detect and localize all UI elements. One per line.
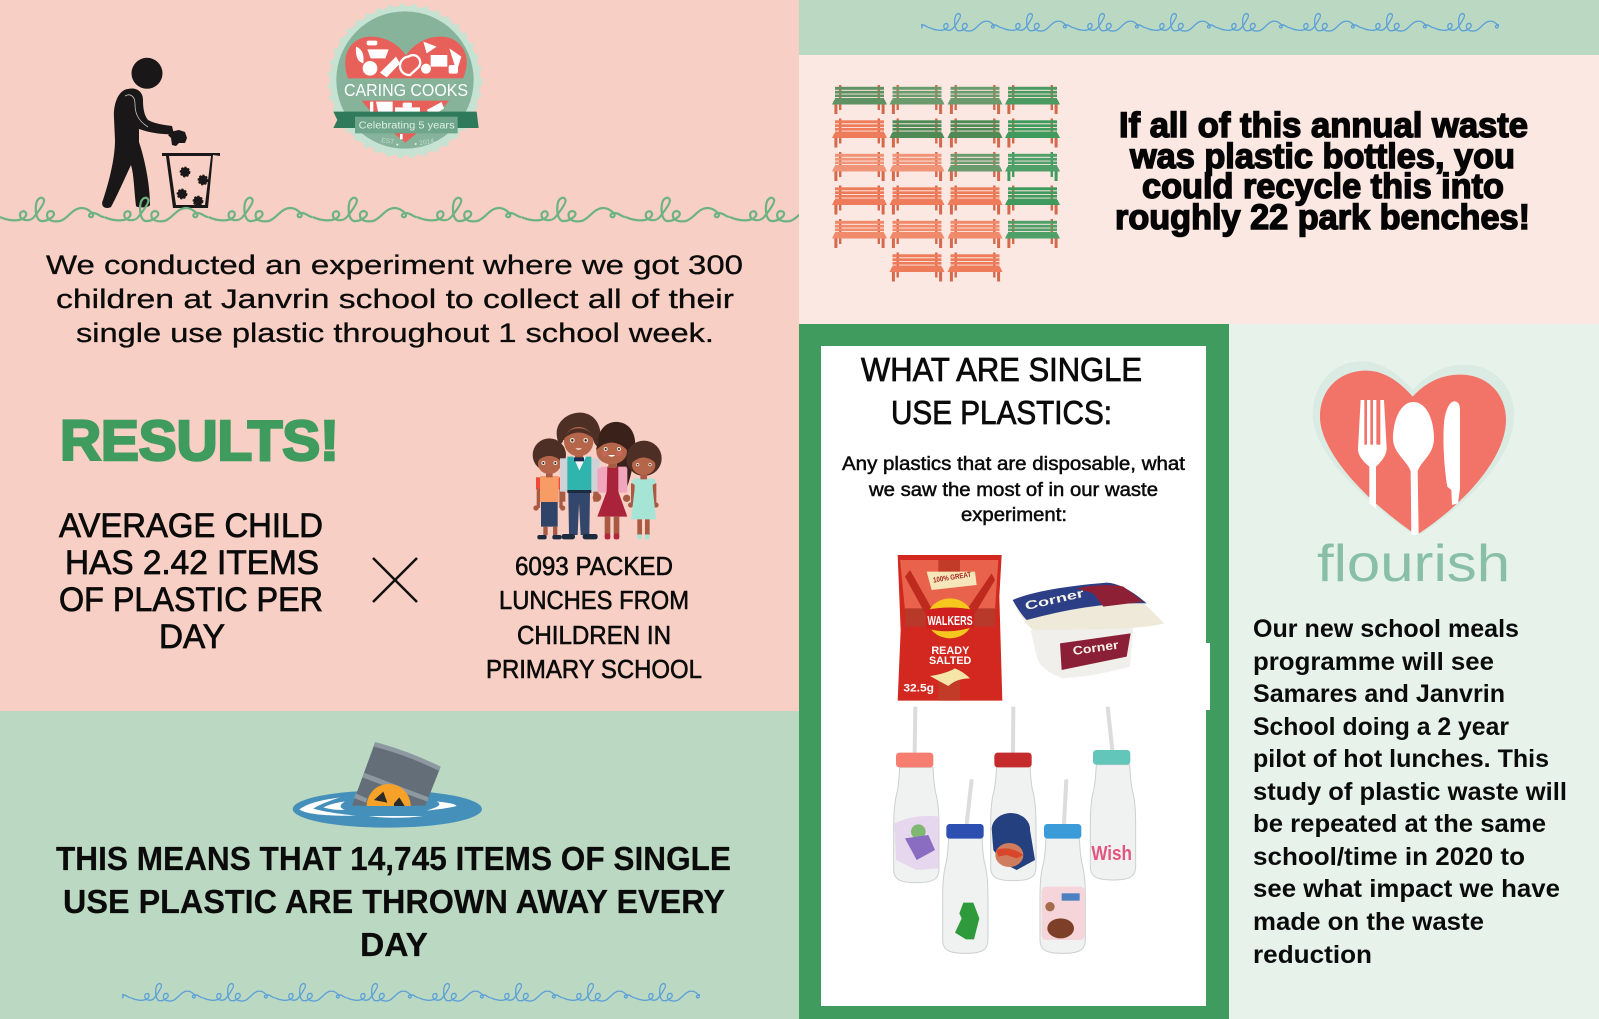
logo: Caring Cooks badge: Celebrating 5 years xyxy=(359,120,455,131)
logo: Caring Cooks badge: 2014 xyxy=(419,138,435,147)
text: school meals programme: pilot of hot lunches. This xyxy=(1253,745,1549,773)
heading: results: RESULTS! xyxy=(60,409,339,473)
panel: daily waste result xyxy=(0,711,799,1019)
ribbon banner xyxy=(333,112,479,133)
text: school meals programme: study of plastic waste will xyxy=(1253,778,1567,806)
yoghurt pot: Corner xyxy=(1024,586,1086,613)
crisp packet: SALTED xyxy=(929,655,972,667)
yoghurt pot: Corner xyxy=(1072,638,1120,658)
woman xyxy=(593,422,635,539)
text: plastics definition: Any plastics that are disposable, what xyxy=(842,454,1186,475)
text: school meals programme: Samares and Janvrin xyxy=(1253,680,1505,708)
panel: experiment introduction xyxy=(0,0,834,711)
logo: Caring Cooks badge xyxy=(330,6,480,156)
text: experiment description xyxy=(46,250,743,348)
icon: person throwing litter in a bin xyxy=(102,58,220,208)
text: school meals programme xyxy=(1253,615,1567,969)
text: average child statistic: AVERAGE CHILD xyxy=(59,507,323,545)
text: school meals programme: see what impact we have xyxy=(1253,875,1560,903)
text: school meals programme: be repeated at the same xyxy=(1253,810,1546,838)
decorative blue squiggle xyxy=(59,984,707,1001)
text: recycling headline: If all of this annual waste xyxy=(1119,106,1528,145)
logo: Caring Cooks badge: CARING COOKS xyxy=(344,80,468,100)
panel: park benches xyxy=(799,55,1599,324)
logo: flourish heart and cutlery xyxy=(1313,361,1514,537)
text: school meals programme: Our new school meals xyxy=(1253,615,1519,643)
text: waste statement xyxy=(56,840,731,963)
icon: barrel sinking in water xyxy=(293,742,482,828)
text: packed lunches statistic: PRIMARY SCHOOL xyxy=(486,654,702,684)
illustration: family of children xyxy=(533,413,662,539)
decorative blue squiggle xyxy=(858,14,1506,31)
text: recycling headline xyxy=(1115,106,1530,237)
heading: what are single use plastics xyxy=(861,351,1142,431)
text: school meals programme: made on the waste xyxy=(1253,908,1484,936)
text: average child statistic: HAS 2.42 ITEMS xyxy=(65,544,319,582)
text: school meals programme: reduction xyxy=(1253,941,1372,969)
text: plastics definition xyxy=(842,454,1186,526)
text: packed lunches statistic: LUNCHES FROM xyxy=(499,585,689,615)
text: recycling headline: roughly 22 park benches! xyxy=(1115,198,1530,237)
boy xyxy=(533,438,566,539)
text: packed lunches statistic: 6093 PACKED xyxy=(515,551,673,581)
text: school meals programme: school/time in 2020 to xyxy=(1253,843,1525,871)
crisp packet: WALKERS xyxy=(927,614,973,628)
plastic bottles: Wish xyxy=(1091,842,1132,865)
text: waste statement: THIS MEANS THAT 14,745 ITEMS OF SINGLE xyxy=(56,840,731,877)
text: plastics definition: experiment: xyxy=(961,505,1067,526)
girl xyxy=(626,441,662,539)
text: school meals programme: programme will see xyxy=(1253,648,1494,676)
decorative green squiggle xyxy=(0,198,834,221)
text: plastics definition: we saw the most of in our waste xyxy=(868,480,1158,501)
text: average child statistic xyxy=(59,507,323,656)
panel: what are single use plastics xyxy=(799,324,1229,1019)
text: packed lunches statistic xyxy=(486,551,702,684)
text: recycling headline: could recycle this into xyxy=(1142,167,1504,206)
crisp packet xyxy=(898,555,1002,701)
crisp packet: 32.5g xyxy=(903,682,934,694)
panel: flourish programme xyxy=(1229,324,1599,1019)
crisp packet: READY xyxy=(931,645,969,657)
text: experiment description: children at Janvrin school to collect all of their xyxy=(56,284,734,314)
panel: top right strip xyxy=(799,0,1599,55)
text: experiment description: We conducted an experiment where we got 300 xyxy=(46,250,743,280)
icon: multiply sign xyxy=(373,558,417,602)
products: crisps, yoghurt and bottles xyxy=(894,555,1164,953)
chart: 22 park benches pictogram xyxy=(832,85,1060,282)
text: school meals programme: School doing a 2 year xyxy=(1253,713,1509,741)
yoghurt pot xyxy=(1013,583,1164,678)
text: average child statistic: DAY xyxy=(159,618,225,656)
text: waste statement: USE PLASTIC ARE THROWN AWAY EVERY xyxy=(63,883,725,920)
crisp packet: 100% GREAT xyxy=(932,570,972,585)
text: packed lunches statistic: CHILDREN IN xyxy=(517,620,671,650)
text: waste statement: DAY xyxy=(360,926,428,963)
logo: Caring Cooks badge: EST xyxy=(381,137,395,146)
heading: what are single use plastics: USE PLASTICS: xyxy=(891,394,1112,431)
text: average child statistic: OF PLASTIC PER xyxy=(59,581,323,619)
text: flourish wordmark: flourish xyxy=(1317,535,1510,593)
heading: what are single use plastics: WHAT ARE SINGLE xyxy=(861,351,1142,388)
man xyxy=(557,413,601,539)
text: recycling headline: was plastic bottles, you xyxy=(1129,137,1515,176)
plastic bottles xyxy=(894,707,1136,953)
text: experiment description: single use plastic throughout 1 school week. xyxy=(76,318,714,348)
